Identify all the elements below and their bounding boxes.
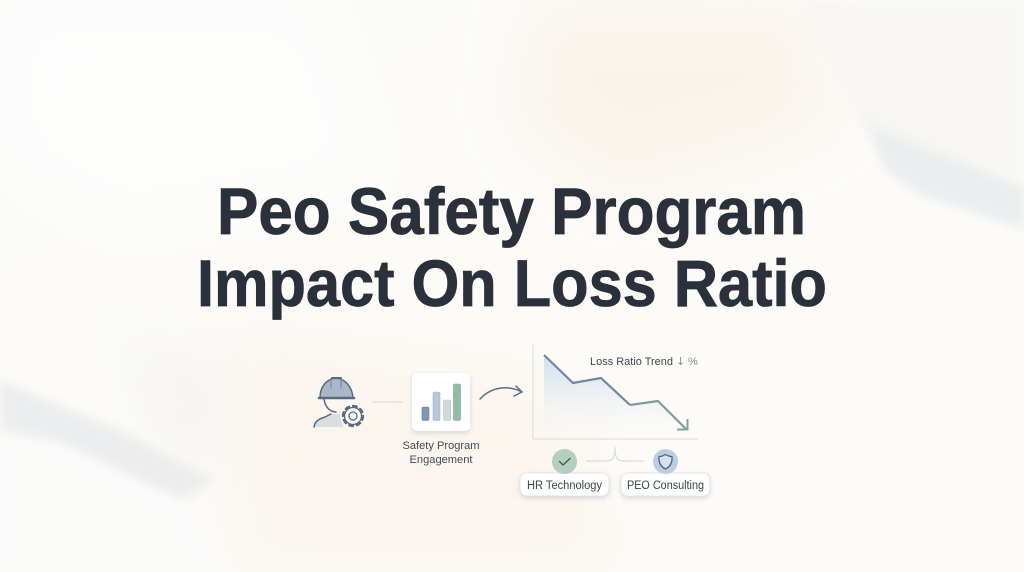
title: Impact On Loss Ratio [197, 246, 827, 320]
chip: HR Technology: HR Technology [527, 480, 602, 492]
bracket connector [586, 447, 644, 461]
chart label: % [688, 356, 698, 368]
icon: check badge [552, 449, 577, 474]
chart label: Loss Ratio Trend [590, 356, 673, 368]
chip: PEO Consulting: PEO Consulting [627, 480, 704, 492]
icon: gear [340, 403, 366, 429]
chart label: ↓ [676, 355, 685, 368]
title: Peo Safety Program [217, 174, 806, 248]
label: safety program engagement [402, 440, 480, 466]
chip: HR Technology [520, 449, 609, 496]
chip: PEO Consulting [621, 449, 710, 496]
label: safety program engagement: Engagement [410, 454, 472, 466]
line chart: loss ratio trend [533, 344, 698, 439]
title [197, 174, 827, 320]
icon card: bar chart [412, 373, 470, 431]
connector line [372, 401, 403, 403]
icon: worker with hard hat and gear [314, 378, 366, 429]
label: safety program engagement: Safety Program [402, 440, 480, 452]
icon: shield badge [653, 449, 678, 474]
arrow [480, 386, 522, 399]
